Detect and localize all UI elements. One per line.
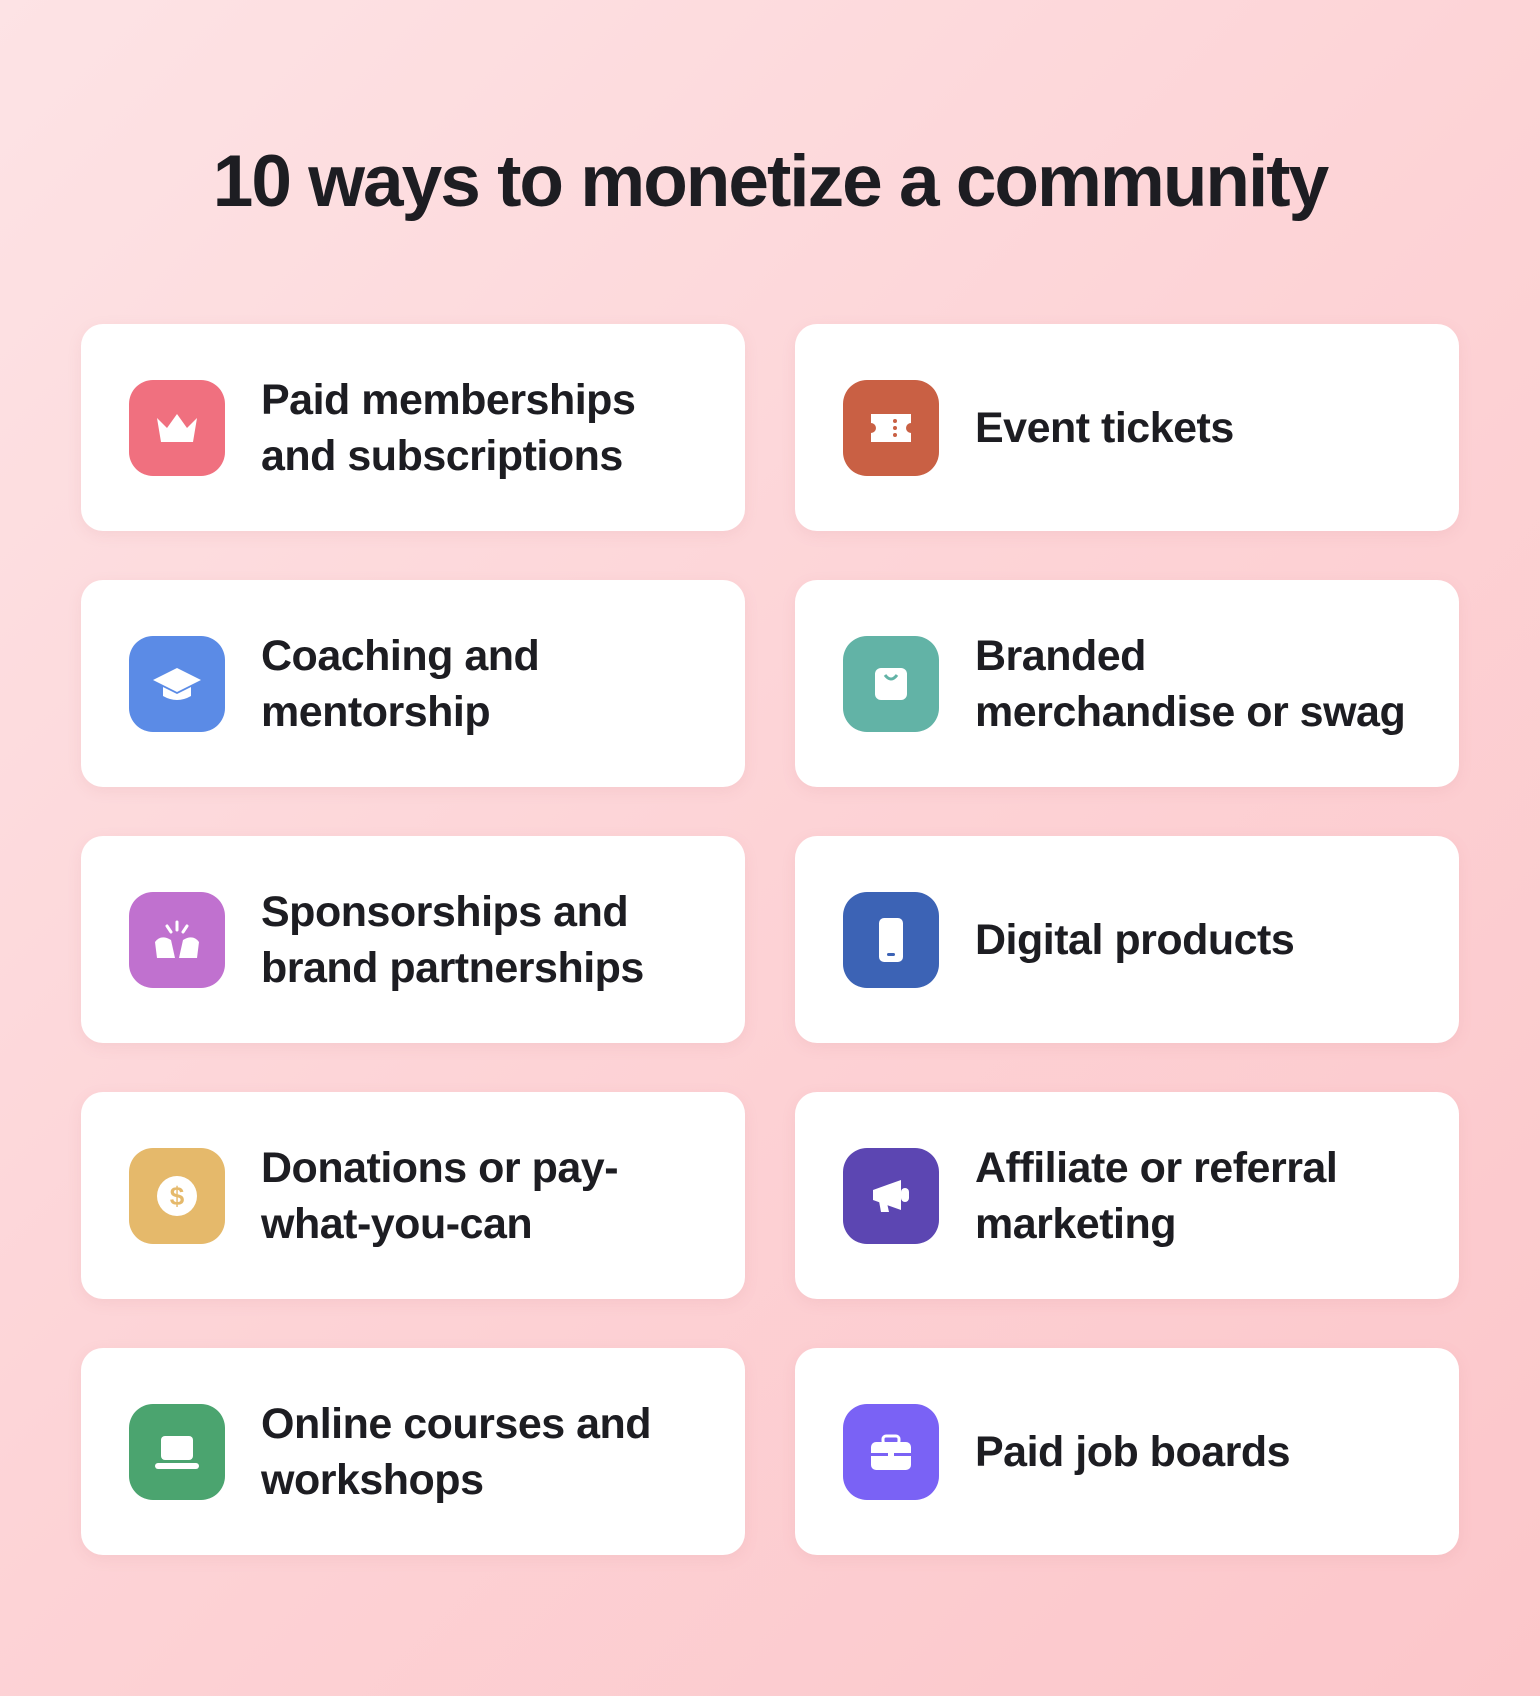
card: event tickets	[795, 324, 1459, 531]
icon: crown	[129, 380, 225, 476]
text	[260, 1400, 651, 1504]
card: coaching	[81, 580, 745, 787]
card: job boards	[795, 1348, 1459, 1555]
card: donations	[81, 1092, 745, 1299]
text	[975, 632, 1405, 736]
text	[261, 376, 635, 480]
text: Online courses and	[261, 1400, 651, 1448]
text: Affiliate or referral	[975, 1144, 1337, 1192]
text	[260, 1144, 618, 1248]
text	[261, 632, 539, 736]
text: marketing	[975, 1200, 1176, 1248]
text: brand partnerships	[261, 944, 644, 992]
icon: dollar coin: $	[170, 1181, 185, 1211]
card: merchandise	[795, 580, 1459, 787]
text	[261, 888, 644, 992]
title: 10 ways to monetize a community	[213, 141, 1327, 222]
card: online courses	[81, 1348, 745, 1555]
card: paid memberships	[81, 324, 745, 531]
icon: dollar coin	[129, 1148, 225, 1244]
icon: ticket	[843, 380, 939, 476]
text: Donations or pay-	[261, 1144, 618, 1192]
text: Branded	[975, 632, 1146, 680]
text: Sponsorships and	[261, 888, 628, 936]
text: Digital products	[975, 916, 1294, 964]
icon: graduation cap	[129, 636, 225, 732]
text: merchandise or swag	[975, 688, 1405, 736]
card: affiliate	[795, 1092, 1459, 1299]
text: Paid job boards	[975, 1428, 1290, 1476]
icon: briefcase	[843, 1404, 939, 1500]
icon: handshake	[129, 892, 225, 988]
text: mentorship	[261, 688, 490, 736]
text: what-you-can	[261, 1200, 532, 1248]
card: sponsorships	[81, 836, 745, 1043]
icon: megaphone	[843, 1148, 939, 1244]
text: and subscriptions	[261, 432, 623, 480]
text: Coaching and	[261, 632, 539, 680]
icon: bag	[843, 636, 939, 732]
text: Paid memberships	[261, 376, 635, 424]
icon: laptop	[129, 1404, 225, 1500]
text	[975, 1144, 1337, 1248]
card: digital products	[795, 836, 1459, 1043]
icon: phone	[843, 892, 939, 988]
text: Event tickets	[975, 404, 1234, 452]
text: workshops	[261, 1456, 484, 1504]
